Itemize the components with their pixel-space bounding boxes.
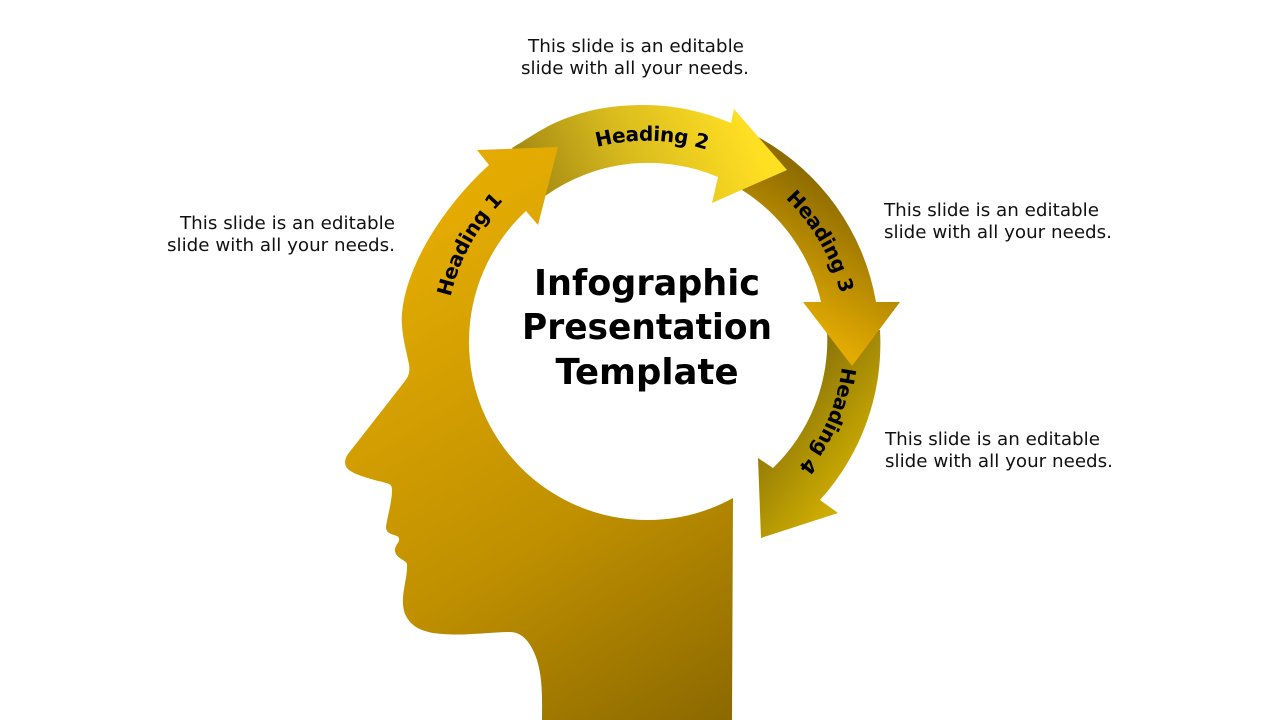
arrow 4 xyxy=(758,330,880,538)
heading 2: Heading 2 xyxy=(596,126,708,150)
title xyxy=(522,263,772,393)
text block: right upper: slide with all your needs. xyxy=(884,223,1112,243)
text block: left xyxy=(167,214,395,256)
title: Presentation xyxy=(522,307,772,348)
text block: right upper: This slide is an editable xyxy=(883,201,1099,221)
head silhouette with arrow 1 xyxy=(345,147,733,720)
text block: top: slide with all your needs. xyxy=(521,59,749,79)
heading 4: Heading 4 xyxy=(800,368,856,474)
title: Template xyxy=(556,352,738,393)
text block: top xyxy=(521,37,749,79)
arrow 2 xyxy=(512,105,787,203)
arrow 3 xyxy=(742,137,900,366)
text block: top: This slide is an editable xyxy=(527,37,744,57)
text block: right lower xyxy=(884,430,1113,472)
heading 3: Heading 3 xyxy=(786,190,854,292)
title: Infographic xyxy=(534,263,760,304)
heading 1: Heading 1 xyxy=(436,194,502,296)
text block: right lower: This slide is an editable xyxy=(884,430,1100,450)
text block: right upper xyxy=(883,201,1112,243)
text block: left: This slide is an editable xyxy=(179,214,395,234)
text block: right lower: slide with all your needs. xyxy=(885,452,1113,472)
text block: left: slide with all your needs. xyxy=(167,236,395,256)
